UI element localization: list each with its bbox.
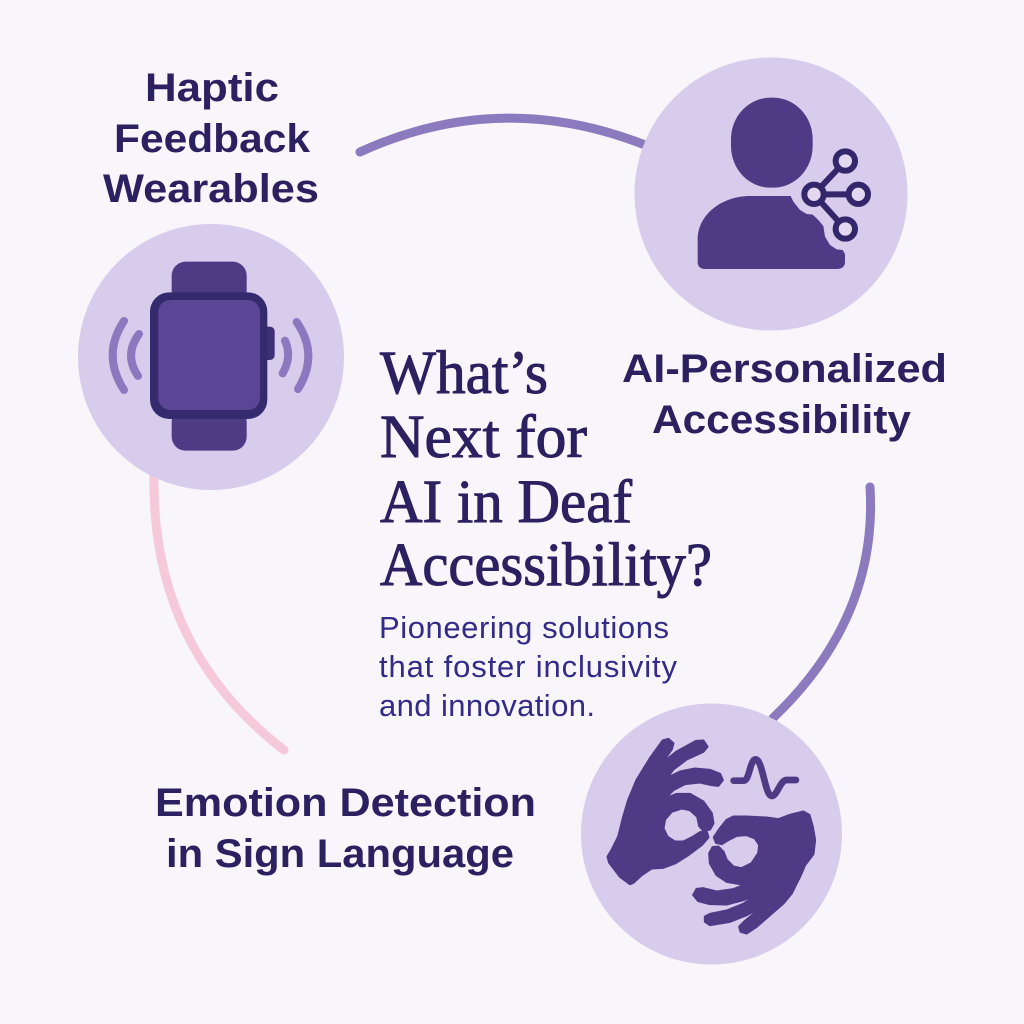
label: haptic feedback wearables: Feedback	[114, 117, 311, 161]
title: Next for	[380, 404, 587, 471]
title: What’s	[380, 340, 548, 407]
subtitle	[379, 610, 678, 723]
label: AI-personalized accessibility: Accessibility	[652, 398, 912, 442]
icon: haptic smartwatch	[78, 224, 344, 490]
label: haptic feedback wearables: Wearables	[103, 167, 319, 211]
title	[380, 340, 712, 599]
label: haptic feedback wearables	[103, 66, 319, 211]
title: AI in Deaf	[380, 469, 633, 536]
title: Accessibility?	[380, 532, 712, 599]
subtitle: that foster inclusivity	[379, 649, 678, 684]
label: haptic feedback wearables: Haptic	[145, 66, 279, 110]
icon: AI personalization person	[634, 58, 908, 330]
icon: signing hands	[581, 704, 842, 964]
subtitle: Pioneering solutions	[379, 610, 669, 645]
arc: right connector	[773, 487, 871, 718]
arc: left pink connector	[154, 475, 284, 750]
arc: top connector	[360, 118, 645, 152]
subtitle: and innovation.	[379, 688, 595, 723]
label: emotion detection in sign language	[155, 781, 536, 876]
label: AI-personalized accessibility: AI-Personalized	[622, 347, 947, 391]
label: AI-personalized accessibility	[622, 347, 947, 442]
label: emotion detection in sign language: in Sign Language	[166, 832, 514, 876]
label: emotion detection in sign language: Emotion Detection	[155, 781, 536, 825]
